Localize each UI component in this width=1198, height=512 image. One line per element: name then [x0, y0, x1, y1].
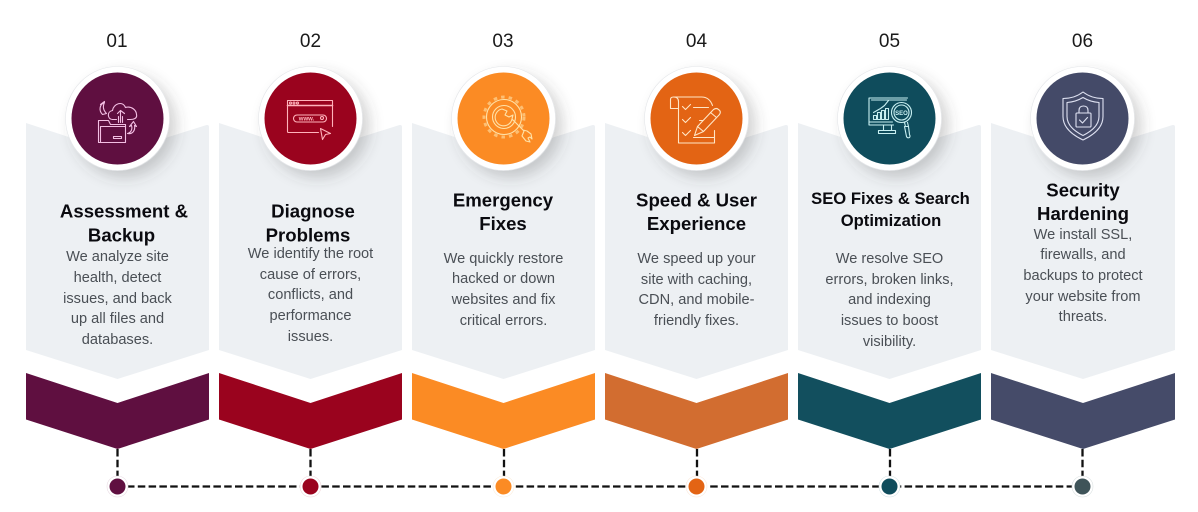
icon: gear and wrench: [484, 97, 532, 142]
description 04: [637, 251, 756, 329]
heading 02: [266, 200, 355, 246]
description 01: databases.: [82, 332, 153, 348]
icon: checklist and pencil: [670, 97, 720, 143]
description 05: errors, broken links,: [825, 272, 954, 288]
heading 02: Diagnose: [271, 200, 355, 222]
heading 01: Backup: [88, 224, 155, 246]
chevron 06: [991, 373, 1175, 449]
heading 05: [811, 189, 970, 230]
description 02: [248, 246, 373, 345]
card background 05: [798, 123, 981, 379]
description 06: [1023, 227, 1143, 325]
description 03: [444, 251, 563, 329]
description 04: friendly fixes.: [654, 313, 739, 329]
step number 06: 06: [1072, 31, 1093, 52]
timeline dot 05: [879, 476, 900, 497]
card background 02: [219, 123, 402, 379]
description 05: visibility.: [863, 334, 916, 350]
step 03: emergency fixes: [412, 31, 595, 497]
icon: cloud and folder: [98, 102, 137, 142]
icon badge 02: [258, 66, 362, 170]
description 06: backups to protect: [1023, 268, 1143, 284]
icon: monitor with SEO magnifier: SEO: [895, 111, 908, 117]
description 02: performance: [270, 308, 351, 324]
heading 03: Emergency: [453, 190, 554, 210]
timeline dot 03: [493, 476, 514, 497]
heading 03: [453, 190, 554, 234]
description 05: and indexing: [848, 292, 931, 308]
chevron 01: [26, 373, 209, 449]
step 02: diagnose problems: [219, 31, 402, 497]
description 01: We analyze site: [66, 249, 169, 265]
description 04: site with caching,: [641, 272, 752, 288]
icon: shield with padlock: [1063, 92, 1103, 140]
heading 02: Problems: [266, 224, 350, 246]
heading 06: Security: [1046, 180, 1120, 200]
chevron 04: [605, 373, 788, 449]
description 06: firewalls, and: [1040, 247, 1126, 263]
heading 05: SEO Fixes & Search: [811, 189, 970, 208]
heading 05: Optimization: [841, 211, 941, 230]
description 05: [825, 251, 954, 350]
description 05: We resolve SEO: [836, 251, 943, 267]
description 01: up all files and: [71, 311, 164, 327]
description 01: [63, 249, 173, 348]
heading 04: Experience: [647, 213, 746, 234]
step number 04: 04: [686, 31, 707, 52]
heading 04: Speed & User: [636, 190, 757, 210]
step 01: assessment and backup: [26, 31, 209, 497]
description 03: critical errors.: [460, 313, 547, 329]
timeline connector: [118, 449, 1082, 486]
description 01: health, detect: [74, 270, 161, 286]
step 06: security hardening: [991, 31, 1175, 497]
description 03: hacked or down: [452, 271, 555, 287]
step 04: speed and user experience: [605, 31, 788, 497]
description 05: issues to boost: [841, 313, 938, 329]
description 01: issues, and back: [63, 291, 173, 307]
chevron 03: [412, 373, 595, 449]
step number 03: 03: [492, 31, 514, 52]
heading 03: Fixes: [479, 213, 527, 234]
description 03: websites and fix: [451, 292, 556, 308]
description 04: CDN, and mobile-: [639, 292, 755, 308]
icon badge 03: [452, 66, 556, 170]
timeline dot 01: [107, 476, 128, 497]
chevron 05: [798, 373, 981, 449]
description 02: issues.: [288, 329, 333, 345]
description 06: threats.: [1059, 309, 1107, 325]
icon badge 04: [644, 66, 748, 170]
card background 01: [26, 123, 209, 379]
description 04: We speed up your: [637, 251, 756, 267]
description 02: We identify the root: [248, 246, 373, 262]
description 03: We quickly restore: [444, 251, 563, 267]
icon badge 06: [1030, 66, 1134, 170]
description 02: conflicts, and: [268, 287, 353, 303]
timeline dot 04: [686, 476, 707, 497]
icon badge 05: [838, 66, 942, 170]
heading 01: Assessment &: [60, 200, 188, 222]
description 06: your website from: [1025, 289, 1141, 305]
heading 06: Hardening: [1037, 203, 1129, 224]
card background 04: [605, 123, 788, 379]
description 02: cause of errors,: [260, 267, 361, 283]
step number 01: 01: [106, 31, 128, 52]
chevron 02: [219, 373, 402, 449]
heading 01: [60, 200, 188, 246]
card background 03: [412, 123, 595, 379]
step 05: SEO fixes and search optimization: [798, 31, 981, 497]
heading 06: [1037, 180, 1129, 224]
icon: browser window: www.: [298, 116, 315, 122]
step number 05: 05: [879, 31, 900, 52]
timeline dot 02: [300, 476, 321, 497]
step number 02: 02: [300, 31, 321, 52]
timeline dot 06: [1072, 476, 1093, 497]
description 06: We install SSL,: [1034, 227, 1132, 243]
icon badge 01: [66, 66, 170, 170]
heading 04: [636, 190, 757, 234]
card background 06: [991, 123, 1175, 379]
